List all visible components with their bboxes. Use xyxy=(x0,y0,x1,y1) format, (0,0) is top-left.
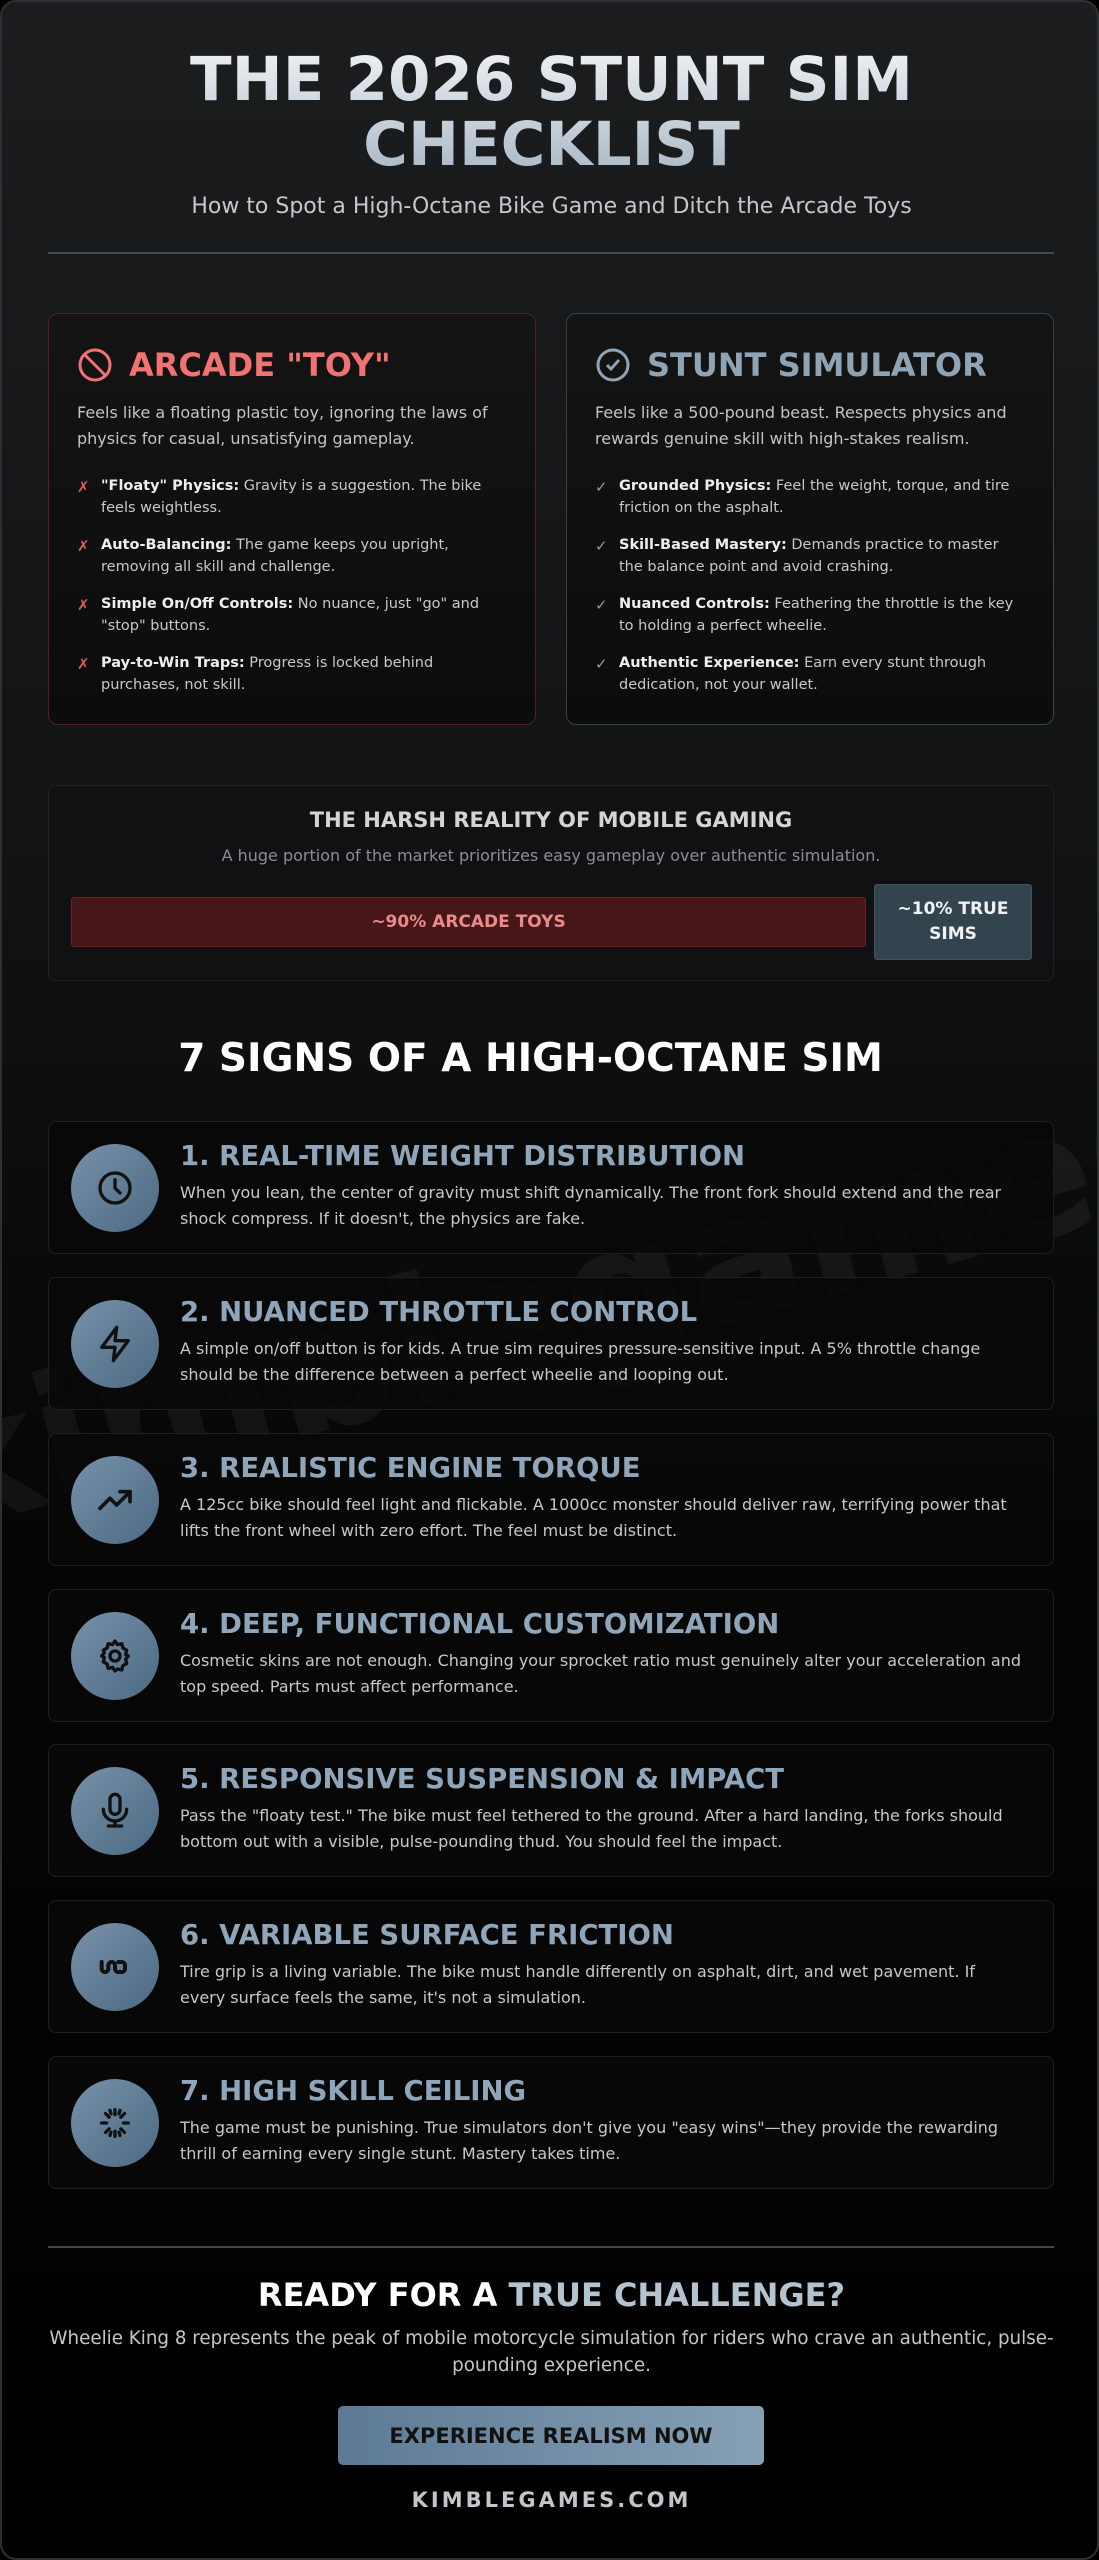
icon: ban xyxy=(78,348,112,382)
panel: harsh reality xyxy=(48,785,1054,981)
icon: bolt xyxy=(71,1300,159,1388)
item: Grounded Physics: Feel the weight, torque, and tire friction on the asphalt. xyxy=(619,478,1009,516)
sign 2: A simple on/off button is for kids. A true sim requires pressure-sensitive input. A 5% throttle change should be the difference between a perfect wheelie and looping out. xyxy=(180,1339,980,1384)
panel: arcade toy: ✗ xyxy=(77,655,90,673)
sign 5 xyxy=(48,1744,1054,1877)
item: "Floaty" Physics: Gravity is a suggestion. The bike feels weightless. xyxy=(101,478,481,516)
panel: arcade toy xyxy=(48,313,536,725)
icon: microphone xyxy=(71,1767,159,1855)
item: Simple On/Off Controls: No nuance, just "go" and "stop" buttons. xyxy=(101,596,479,634)
sign 6: Tire grip is a living variable. The bike must handle differently on asphalt, dirt, and wet pavement. If every surface feels the same, it's not a simulation. xyxy=(180,1962,975,2007)
title: THE 2026 STUNT SIM xyxy=(190,44,913,115)
sign 6 xyxy=(48,1900,1054,2033)
item: Skill-Based Mastery: Demands practice to master the balance point and avoid crashing. xyxy=(619,537,999,575)
sign 2 xyxy=(48,1277,1054,1410)
button xyxy=(338,2406,764,2465)
icon: check circle xyxy=(596,348,630,382)
sign 2: 2. NUANCED THROTTLE CONTROL xyxy=(180,1296,697,1328)
footer text: Wheelie King 8 represents the peak of mobile motorcycle simulation for riders who crave an authentic, pulse-pounding experience. xyxy=(49,2328,1054,2376)
description: Feels like a 500-pound beast. Respects physics and rewards genuine skill with high-stakes realism. xyxy=(595,403,1007,448)
sign 5: 5. RESPONSIVE SUSPENSION & IMPACT xyxy=(180,1763,784,1795)
subtext: A huge portion of the market prioritizes easy gameplay over authentic simulation. xyxy=(222,846,880,865)
heading: stunt simulator: STUNT SIMULATOR xyxy=(647,346,987,384)
title xyxy=(2,47,1099,177)
sign 4: 4. DEEP, FUNCTIONAL CUSTOMIZATION xyxy=(180,1608,779,1640)
panel: stunt simulator: ✓ xyxy=(595,478,608,496)
panel: stunt simulator: ✓ xyxy=(595,537,608,555)
heading: arcade toy: ARCADE "TOY" xyxy=(129,346,391,384)
icon: link xyxy=(71,1923,159,2011)
subtitle: How to Spot a High-Octane Bike Game and Ditch the Arcade Toys xyxy=(191,194,912,219)
title: CHECKLIST xyxy=(363,109,740,180)
sign 4: Cosmetic skins are not enough. Changing your sprocket ratio must genuinely alter your acceleration and top speed. Parts must affect performance. xyxy=(180,1651,1021,1696)
icon: gear xyxy=(71,1612,159,1700)
sign 3: A 125cc bike should feel light and flickable. A 1000cc monster should deliver raw, terrifying power that lifts the front wheel with zero effort. The feel must be distinct. xyxy=(180,1495,1007,1540)
panel: stunt simulator: ✓ xyxy=(595,655,608,673)
item: Pay-to-Win Traps: Progress is locked behind purchases, not skill. xyxy=(101,655,433,693)
panel: arcade toy: ✗ xyxy=(77,537,90,555)
heading: ready for a true challenge: READY FOR A TRUE CHALLENGE? xyxy=(258,2276,845,2314)
item: Authentic Experience: Earn every stunt through dedication, not your wallet. xyxy=(619,655,986,693)
item: Auto-Balancing: The game keeps you upright, removing all skill and challenge. xyxy=(101,537,449,575)
sign 1 xyxy=(48,1121,1054,1254)
bar: 10% sims xyxy=(874,884,1032,960)
panel: arcade toy: ✗ xyxy=(77,478,90,496)
sign 1: 1. REAL-TIME WEIGHT DISTRIBUTION xyxy=(180,1140,745,1172)
sign 4 xyxy=(48,1589,1054,1722)
sign 6: 6. VARIABLE SURFACE FRICTION xyxy=(180,1919,674,1951)
heading: 7 signs: 7 SIGNS OF A HIGH-OCTANE SIM xyxy=(178,1036,883,1081)
sign 7: 7. HIGH SKILL CEILING xyxy=(180,2075,526,2107)
sign 7: The game must be punishing. True simulators don't give you "easy wins"—they provide the rewarding thrill of earning every single stunt. Mastery takes time. xyxy=(180,2118,998,2163)
button: EXPERIENCE REALISM NOW xyxy=(389,2424,713,2448)
description: Feels like a floating plastic toy, ignoring the laws of physics for casual, unsatisfying gameplay. xyxy=(77,403,488,448)
brand: KIMBLEGAMES.COM xyxy=(412,2488,691,2512)
icon: clock xyxy=(71,1144,159,1232)
heading: THE HARSH REALITY OF MOBILE GAMING xyxy=(310,808,792,832)
panel: arcade toy: ✗ xyxy=(77,596,90,614)
item: Nuanced Controls: Feathering the throttle is the key to holding a perfect wheelie. xyxy=(619,596,1013,634)
bar: 90% arcade xyxy=(71,897,866,947)
panel: stunt simulator xyxy=(566,313,1054,725)
icon: loader xyxy=(71,2079,159,2167)
bar: 10% sims: SIMS xyxy=(929,924,977,944)
panel: stunt simulator: ✓ xyxy=(595,596,608,614)
bar: 90% arcade: ~90% ARCADE TOYS xyxy=(371,912,566,932)
sign 5: Pass the "floaty test." The bike must feel tethered to the ground. After a hard landing, the forks should bottom out with a visible, pulse-pounding thud. You should feel the impact. xyxy=(180,1806,1003,1851)
icon: trending up xyxy=(71,1456,159,1544)
sign 1: When you lean, the center of gravity must shift dynamically. The front fork should extend and the rear shock compress. If it doesn't, the physics are fake. xyxy=(180,1183,1001,1228)
sign 7 xyxy=(48,2056,1054,2189)
sign 3 xyxy=(48,1433,1054,1566)
sign 3: 3. REALISTIC ENGINE TORQUE xyxy=(180,1452,640,1484)
bar: 10% sims: ~10% TRUE xyxy=(898,899,1008,919)
